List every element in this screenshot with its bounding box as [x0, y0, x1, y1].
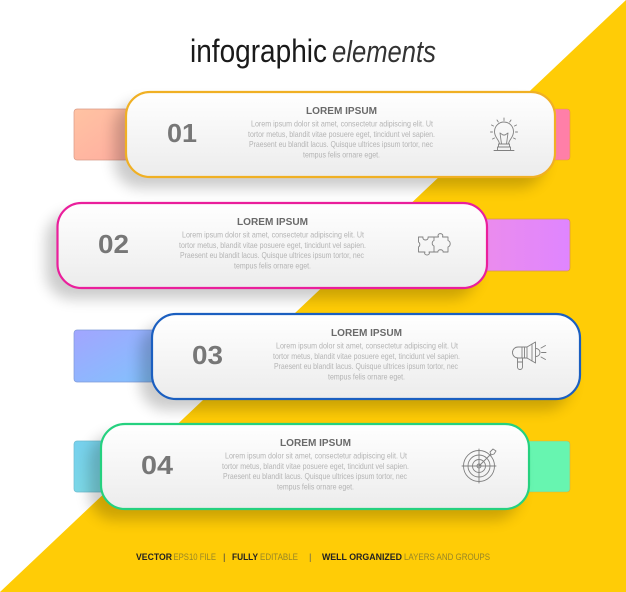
number 04: 04	[141, 450, 174, 480]
title: infographic	[190, 33, 327, 69]
heading 04: LOREM IPSUM	[280, 437, 351, 449]
icon: megaphone	[512, 342, 546, 370]
footer line: WELL ORGANIZED	[322, 552, 402, 563]
icon: puzzle	[418, 234, 450, 255]
body text 01: Praesent eu blandit lacus. Quisque ultrices ipsum tortor, nec	[249, 139, 433, 149]
body text 03: tortor metus, blandit vitae posuere eget, tincidunt vel sapien.	[273, 351, 460, 361]
body text 02: Praesent eu blandit lacus. Quisque ultrices ipsum tortor, nec	[180, 250, 364, 260]
body text 02	[179, 230, 366, 270]
card 04	[101, 424, 529, 509]
footer line: VECTOR	[136, 552, 172, 563]
left tab 03	[74, 330, 169, 382]
right tab 02	[470, 219, 570, 271]
panel: step 02	[46, 203, 570, 299]
icon: target	[462, 449, 496, 483]
title	[190, 33, 436, 69]
right tab 04	[510, 441, 570, 492]
number 01: 01	[167, 118, 197, 148]
left tab 01	[74, 109, 144, 160]
body text 01: tempus felis ornare eget.	[303, 150, 380, 160]
body text 03: tempus felis ornare eget.	[328, 372, 405, 382]
body text 04	[222, 450, 409, 492]
panel: step 01	[74, 92, 570, 188]
footer line: FULLY	[232, 552, 259, 563]
footer line: |	[223, 552, 225, 563]
footer line: LAYERS AND GROUPS	[404, 552, 490, 563]
panel: step 03	[74, 314, 580, 410]
body text 02: tempus felis ornare eget.	[234, 260, 311, 270]
footer line: |	[309, 552, 311, 563]
body text 01	[248, 118, 435, 160]
body text 03	[273, 340, 460, 382]
heading 01: LOREM IPSUM	[306, 105, 377, 117]
body text 04: tortor metus, blandit vitae posuere eget, tincidunt vel sapien.	[222, 461, 409, 471]
body text 02: Lorem ipsum dolor sit amet, consectetur adipiscing elit. Ut	[182, 230, 365, 240]
right tab 01	[530, 109, 570, 160]
body text 04: tempus felis ornare eget.	[277, 482, 354, 492]
footer line: EDITABLE	[260, 552, 298, 563]
icon: light bulb	[490, 118, 518, 150]
card 02	[58, 203, 487, 288]
card 03	[152, 314, 580, 399]
body text 04: Lorem ipsum dolor sit amet, consectetur adipiscing elit. Ut	[225, 450, 408, 460]
body text 01: tortor metus, blandit vitae posuere eget, tincidunt vel sapien.	[248, 129, 435, 139]
heading 03: LOREM IPSUM	[331, 327, 402, 339]
body text 02: tortor metus, blandit vitae posuere eget, tincidunt vel sapien.	[179, 240, 366, 250]
body text 04: Praesent eu blandit lacus. Quisque ultrices ipsum tortor, nec	[223, 471, 407, 481]
number 03: 03	[192, 340, 223, 370]
title: elements	[332, 34, 436, 69]
footer line: EPS10 FILE	[174, 552, 216, 563]
body text 03: Lorem ipsum dolor sit amet, consectetur adipiscing elit. Ut	[276, 340, 459, 350]
left tab 04	[74, 441, 124, 492]
number 02: 02	[98, 229, 129, 259]
panel: step 04	[74, 424, 570, 520]
heading 02: LOREM IPSUM	[237, 216, 308, 228]
body text 01: Lorem ipsum dolor sit amet, consectetur adipiscing elit. Ut	[251, 118, 434, 128]
card 01	[126, 92, 555, 177]
body text 03: Praesent eu blandit lacus. Quisque ultrices ipsum tortor, nec	[274, 361, 458, 371]
footer line	[136, 552, 490, 563]
